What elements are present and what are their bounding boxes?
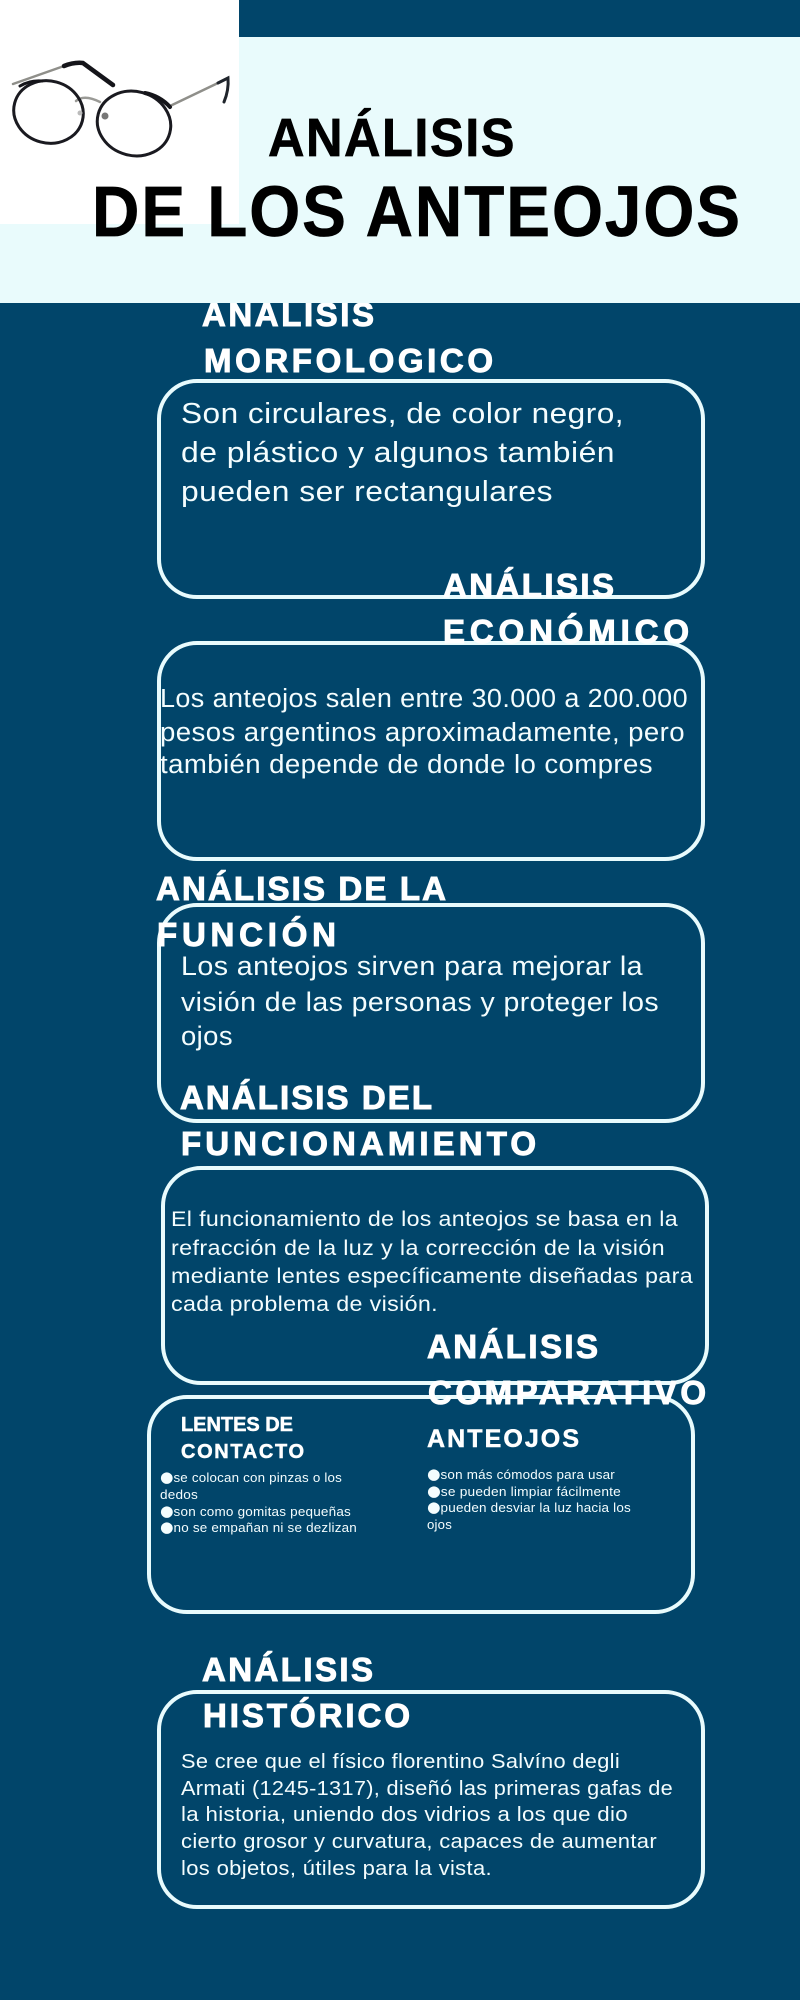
list: anteojos: ●pueden desviar la luz hacia los	[427, 1498, 631, 1516]
title: ANÁLISIS	[268, 108, 516, 168]
box: histórico	[159, 1692, 703, 1907]
light header band	[0, 37, 800, 303]
title: DE LOS ANTEOJOS	[92, 173, 742, 252]
icon: glasses	[7, 63, 228, 164]
heading: análisis de la función: FUNCIÓN	[157, 916, 336, 953]
text: histórico	[181, 1750, 673, 1880]
text: económico	[160, 685, 688, 779]
heading: análisis comparativo: ANÁLISIS	[427, 1328, 598, 1365]
box: económico	[159, 643, 703, 859]
heading: análisis comparativo	[427, 1328, 706, 1411]
heading: análisis morfológico	[202, 296, 493, 379]
text: función: Los anteojos sirven para mejorar la	[181, 951, 643, 981]
subheading: anteojos: ANTEOJOS	[427, 1425, 579, 1453]
text: funcionamiento	[171, 1207, 693, 1316]
heading: análisis histórico: ANÁLISIS	[202, 1651, 373, 1688]
list: lentes de contacto: dedos	[160, 1487, 198, 1502]
subheading: lentes de contacto	[181, 1414, 304, 1463]
text: función	[181, 951, 659, 1051]
top dark band	[239, 0, 800, 37]
heading: análisis económico: ECONÓMICO	[443, 613, 689, 650]
panel: análisis morfológico	[159, 296, 703, 597]
subheading: lentes de contacto: LENTES DE	[181, 1414, 293, 1436]
heading: análisis morfológico: ANÁLISIS	[202, 296, 374, 333]
box: funcionamiento	[163, 1168, 707, 1383]
text: funcionamiento: El funcionamiento de los anteojos se basa en la	[171, 1207, 678, 1231]
column: anteojos	[427, 1425, 631, 1532]
panel: análisis histórico	[159, 1651, 703, 1907]
panel: análisis comparativo	[149, 1328, 706, 1612]
list: anteojos: ●se pueden limpiar fácilmente	[427, 1482, 621, 1500]
text: histórico: la historia, uniendo dos vidrios a los que dio	[181, 1803, 628, 1826]
list: anteojos: ●son más cómodos para usar	[427, 1465, 615, 1483]
heading: análisis histórico	[202, 1651, 410, 1734]
heading: análisis de la función: ANÁLISIS DE LA	[156, 870, 446, 907]
text: histórico: Se cree que el físico florentino Salvíno degli	[181, 1750, 620, 1773]
list: lentes de contacto	[160, 1468, 357, 1536]
heading: análisis comparativo: COMPARATIVO	[428, 1374, 706, 1411]
text: funcionamiento: cada problema de visión.	[171, 1292, 438, 1316]
panel: análisis del funcionamiento	[163, 1079, 707, 1383]
heading: análisis del funcionamiento: FUNCIONAMIENTO	[181, 1125, 536, 1162]
text: funcionamiento: refracción de la luz y la corrección de la visión	[171, 1236, 665, 1260]
heading: análisis del funcionamiento: ANÁLISIS DEL	[180, 1079, 432, 1116]
white image panel	[0, 0, 239, 224]
text: morfológico: Son circulares, de color negro,	[181, 398, 624, 430]
text: histórico: cierto grosor y curvatura, capaces de aumentar	[181, 1830, 657, 1853]
subheading: lentes de contacto: CONTACTO	[181, 1441, 304, 1463]
text: funcionamiento: mediante lentes específicamente diseñadas para	[171, 1264, 693, 1288]
heading: análisis del funcionamiento	[180, 1079, 536, 1162]
header panel	[0, 0, 800, 303]
box: morfológico	[159, 381, 703, 597]
heading: análisis de la función	[156, 870, 446, 953]
heading: análisis morfológico: MORFOLOGICO	[204, 342, 493, 379]
title	[92, 108, 742, 252]
list: anteojos	[427, 1465, 631, 1532]
heading: análisis histórico: HISTÓRICO	[203, 1697, 410, 1734]
list: lentes de contacto: ●son como gomitas pequeñas	[160, 1502, 351, 1520]
box: comparativo	[149, 1397, 693, 1612]
heading: análisis económico	[443, 567, 689, 650]
box: función	[159, 905, 703, 1121]
list: lentes de contacto: ●se colocan con pinzas o los	[160, 1468, 342, 1486]
panel: análisis de la función	[156, 870, 703, 1121]
text: función: ojos	[181, 1021, 233, 1051]
list: anteojos: ojos	[427, 1517, 452, 1532]
heading: análisis económico: ANÁLISIS	[443, 567, 614, 604]
text: económico: también depende de donde lo compres	[160, 751, 653, 779]
text: función: visión de las personas y proteger los	[181, 987, 659, 1017]
list: lentes de contacto: ●no se empañan ni se dezlizan	[160, 1518, 357, 1536]
text: morfológico: de plástico y algunos también	[181, 437, 615, 469]
panel: análisis económico	[159, 567, 703, 859]
text: morfológico: pueden ser rectangulares	[181, 476, 553, 508]
text: histórico: los objetos, útiles para la vista.	[181, 1857, 492, 1880]
text: histórico: Armati (1245-1317), diseñó las primeras gafas de	[181, 1777, 673, 1800]
text: morfológico	[181, 398, 624, 508]
text: económico: pesos argentinos aproximadamente, pero	[160, 719, 685, 747]
column: lentes de contacto	[160, 1414, 357, 1536]
text: económico: Los anteojos salen entre 30.000 a 200.000	[160, 685, 688, 713]
